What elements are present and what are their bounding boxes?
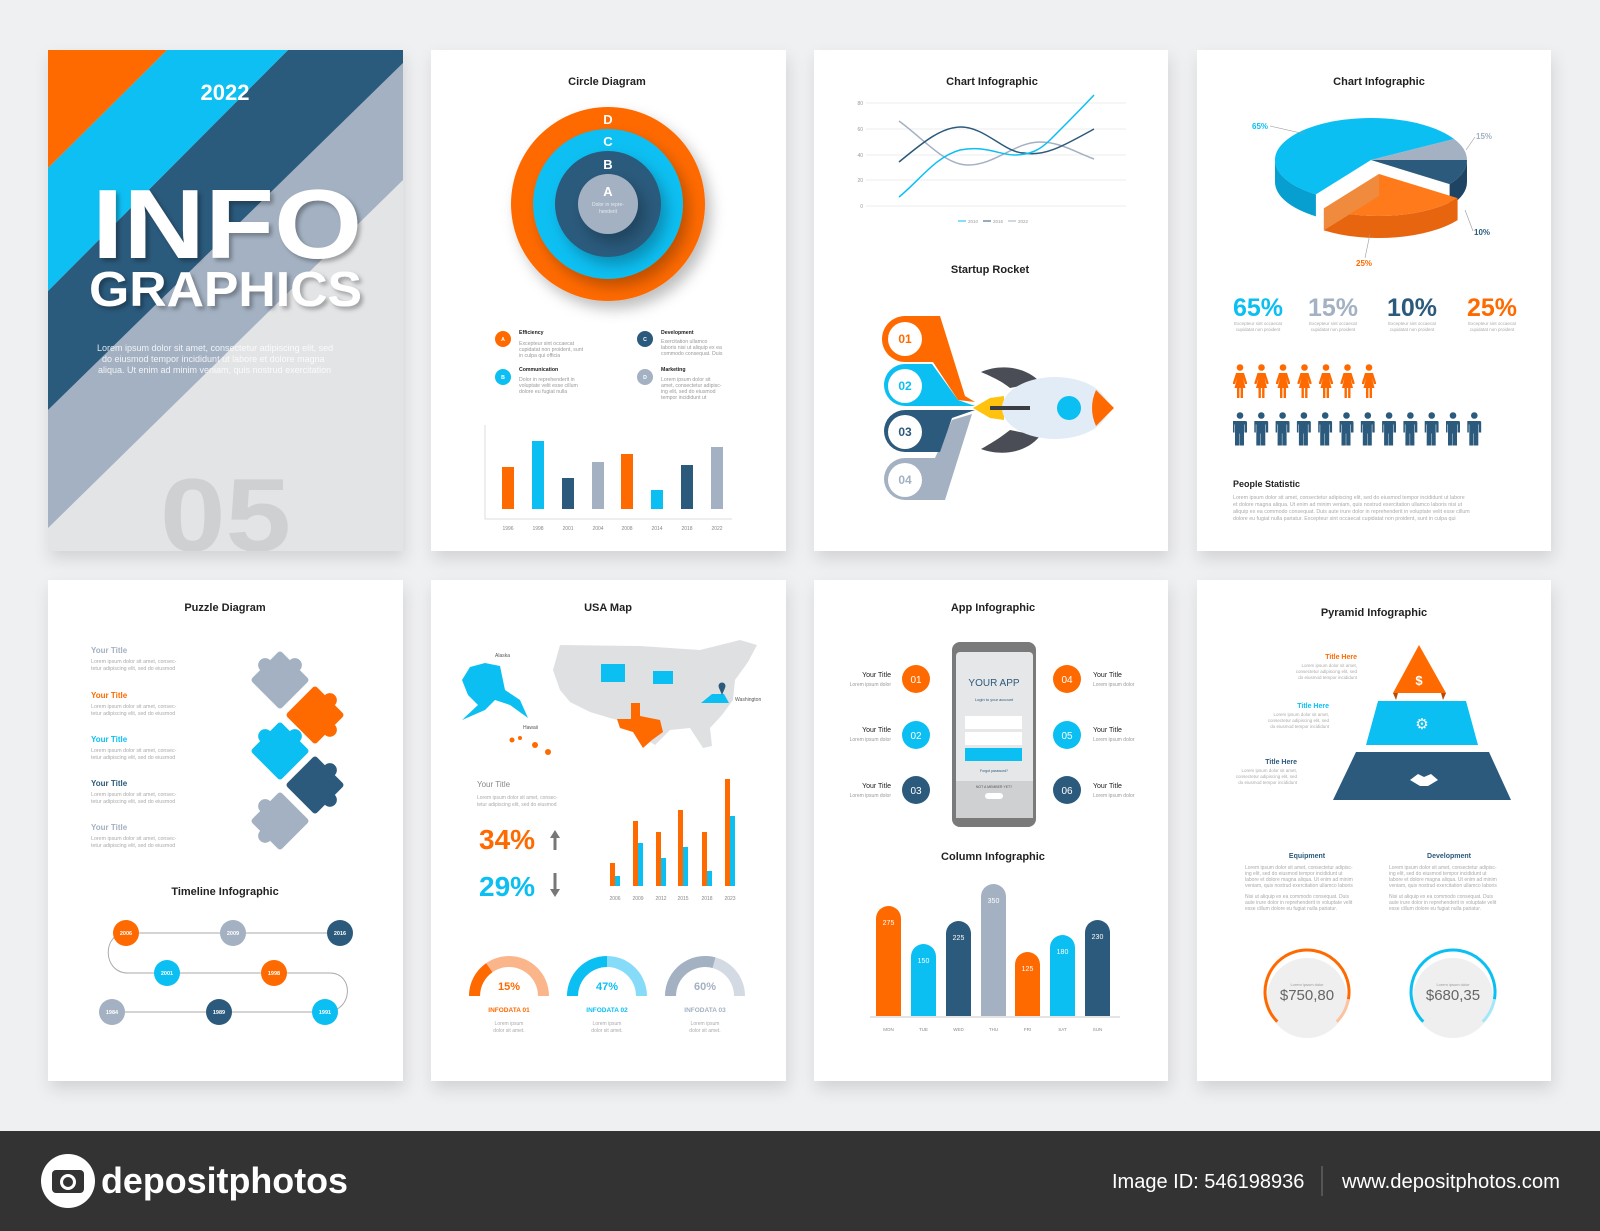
app steps: Lorem ipsum dolor <box>850 737 891 743</box>
pyramid labels: do eiusmod tempor incididunt <box>1238 780 1298 785</box>
phone mockup: NOT A MEMBER YET? <box>976 785 1012 789</box>
text columns: veniam, quis nostrud exercitation ullamco laboris <box>1245 883 1353 889</box>
bar chart <box>485 425 732 532</box>
grouped bar chart: 2012 <box>655 896 667 902</box>
timeline: 2006 <box>120 931 132 937</box>
stats text: 29% <box>479 871 535 902</box>
heading: chart infographic: Chart Infographic <box>946 76 1038 88</box>
text columns: aute irure dolor in reprehenderit in voluptate velit <box>1389 900 1497 906</box>
app steps: Your Title <box>862 727 891 734</box>
people icons <box>1232 364 1481 446</box>
column chart: 125 <box>1022 966 1033 973</box>
text columns: labore et dolore magna aliqua. Ut enim ad minim <box>1245 877 1353 883</box>
puzzle text items: tetur adipiscing elit, sed do eiusmod <box>91 666 175 672</box>
text columns: labore et dolore magna aliqua. Ut enim ad minim <box>1389 877 1497 883</box>
legend: in culpa qui officia <box>519 353 560 359</box>
timeline: 1998 <box>268 971 280 977</box>
legend <box>495 330 723 401</box>
legend: ing elit, sed do eiusmod <box>661 389 716 395</box>
3d pie chart: 25% <box>1356 259 1372 268</box>
puzzle text items: Lorem ipsum dolor sit amet, consec- <box>91 748 177 754</box>
app steps: Your Title <box>1093 783 1122 790</box>
puzzle text items: Your Title <box>91 823 128 832</box>
pyramid labels: consectetur adipiscing elit, sed <box>1268 718 1329 723</box>
panel: pie chart and people statistic: Excepteur sint occaecat <box>1234 321 1283 326</box>
gauges: 47% <box>596 981 618 993</box>
app steps: Lorem ipsum dolor <box>1093 793 1135 799</box>
phone mockup: YOUR APP <box>968 678 1020 689</box>
stats numbers: 25% <box>1467 294 1517 322</box>
gauges: dolor sit amet. <box>591 1028 623 1034</box>
text columns: Development <box>1427 853 1472 860</box>
text columns <box>1245 853 1497 912</box>
gauges: 60% <box>694 981 716 993</box>
bar chart: 1998 <box>532 526 544 532</box>
panel: puzzle and timeline <box>48 580 403 1081</box>
stats numbers <box>1233 294 1517 322</box>
timeline: 2001 <box>161 971 173 977</box>
app steps: Your Title <box>1093 727 1122 734</box>
app steps: 06 <box>1061 786 1073 797</box>
heading: USA Map <box>584 602 632 614</box>
panel: pie chart and people statistic: cupidatat non proident <box>1470 327 1515 332</box>
map: Washington <box>735 697 761 703</box>
text columns: ing elit, sed do eiusmod tempor incididunt ut <box>1245 871 1343 877</box>
stats text: Lorem ipsum dolor sit amet, consec- <box>477 795 558 801</box>
gauges: dolor sit amet. <box>493 1028 525 1034</box>
legend: Efficiency <box>519 330 544 336</box>
line chart: 60 <box>857 127 863 133</box>
app steps: Lorem ipsum dolor <box>1093 737 1135 743</box>
money circle 1: $750,80 <box>1280 987 1334 1004</box>
rocket tabs: 01 <box>898 332 912 346</box>
bar chart: 1996 <box>502 526 514 532</box>
text columns: Nisi ut aliquip ex ea commodo consequat. Duis <box>1245 894 1349 900</box>
puzzle text items: tetur adipiscing elit, sed do eiusmod <box>91 711 175 717</box>
puzzle text items: Your Title <box>91 735 128 744</box>
panel: pyramid <box>1197 580 1551 1081</box>
phone mockup: Login to your account <box>975 697 1014 702</box>
heading: startup rocket: Startup Rocket <box>951 264 1029 276</box>
stats text: tetur adipiscing elit, sed do eiusmod <box>477 802 557 808</box>
money circle 2: $680,35 <box>1426 987 1480 1004</box>
app steps: 03 <box>910 786 922 797</box>
image id: Image ID: 546198936 <box>1112 1171 1304 1193</box>
map: Hawaii <box>523 725 538 731</box>
people statistic text: et dolore magna aliqua. Ut enim ad minim veniam, quis nostrud exercitation ullamco laboris nisi ut <box>1233 502 1463 508</box>
grouped bar chart: 2023 <box>724 896 736 902</box>
text columns: esse cillum dolore eu fugiat nulla pariatur. <box>1245 906 1337 912</box>
pyramid labels <box>1236 654 1358 785</box>
app steps: Your Title <box>1093 672 1122 679</box>
cover text: Lorem ipsum dolor sit amet, consectetur adipiscing elit, sed <box>97 343 333 353</box>
rocket tabs: 04 <box>898 473 912 487</box>
heading: timeline: Timeline Infographic <box>171 886 279 898</box>
icon: rocket <box>973 367 1114 453</box>
rocket tabs <box>882 316 975 500</box>
app steps: 02 <box>910 731 922 742</box>
gauges: Lorem ipsum <box>593 1021 621 1027</box>
grouped bar chart: 2009 <box>632 896 644 902</box>
gauges: INFODATA 02 <box>586 1007 628 1014</box>
heading: column: Column Infographic <box>941 851 1045 863</box>
panel: pie chart and people statistic: Excepteur sint occaecat <box>1468 321 1517 326</box>
grouped bar chart: 2015 <box>677 896 689 902</box>
panel: line chart and startup rocket <box>814 50 1168 551</box>
stats text <box>477 780 560 902</box>
icon: camera logo <box>41 1154 95 1208</box>
heading: Chart Infographic <box>1333 76 1425 88</box>
puzzle text items <box>91 646 177 849</box>
3d pie chart: 10% <box>1474 228 1490 237</box>
gauges: INFODATA 01 <box>488 1007 530 1014</box>
app steps: Your Title <box>862 783 891 790</box>
phone mockup <box>952 642 1036 827</box>
line chart <box>857 95 1126 224</box>
bar chart: 2014 <box>651 526 663 532</box>
line chart: 2010 <box>968 219 979 224</box>
pyramid labels: do eiusmod tempor incididunt <box>1270 724 1330 729</box>
money circle 2: Lorem ipsum dolor <box>1436 982 1470 987</box>
bar chart: 2004 <box>592 526 604 532</box>
legend: Marketing <box>661 367 686 373</box>
legend: Dolor in reprehenderit in <box>519 377 575 383</box>
grouped bar chart: 2018 <box>701 896 713 902</box>
legend: voluptate velit esse cillum <box>519 383 578 389</box>
column chart: TUE <box>919 1027 928 1032</box>
panel: pie chart and people statistic: Excepteur sint occaecat <box>1309 321 1358 326</box>
legend: C <box>643 337 647 343</box>
text columns: esse cillum dolore eu fugiat nulla pariatur. <box>1389 906 1481 912</box>
pyramid labels: consectetur adipiscing elit, sed <box>1296 669 1357 674</box>
panel: pie chart and people statistic: Excepteur sint occaecat <box>1388 321 1437 326</box>
timeline: 1984 <box>106 1010 119 1016</box>
column chart: THU <box>989 1027 998 1032</box>
heading: Circle Diagram <box>568 76 646 88</box>
legend: Lorem ipsum dolor sit <box>661 377 711 383</box>
panel: pie chart and people statistic: cupidatat non proident <box>1311 327 1356 332</box>
panel: pie chart and people statistic: cupidatat non proident <box>1390 327 1435 332</box>
legend: A <box>501 337 505 343</box>
legend: amet, consectetur adipisc- <box>661 383 722 389</box>
pyramid labels: Lorem ipsum dolor sit amet, <box>1273 712 1329 717</box>
panel: app and column infographic <box>814 580 1168 1081</box>
stats numbers: 15% <box>1308 294 1358 322</box>
pyramid <box>1333 645 1511 800</box>
gauges: 15% <box>498 981 520 993</box>
app steps: Your Title <box>862 672 891 679</box>
timeline: 2016 <box>334 931 346 937</box>
cover title GRAPHICS: GRAPHICS <box>89 263 362 317</box>
cover year: 2022 <box>201 80 249 105</box>
rocket tabs: 02 <box>898 379 912 393</box>
footer bar <box>0 1131 1600 1231</box>
legend: D <box>643 375 647 381</box>
gauges: dolor sit amet. <box>689 1028 721 1034</box>
people statistic text: People Statistic <box>1233 479 1300 489</box>
puzzle text items: tetur adipiscing elit, sed do eiusmod <box>91 843 175 849</box>
panel: pie chart and people statistic <box>1197 50 1551 551</box>
nested circles: henderit <box>599 209 618 215</box>
nested circles <box>511 107 705 301</box>
panel: pie chart and people statistic: cupidatat non proident <box>1236 327 1281 332</box>
3d pie chart <box>1252 118 1492 268</box>
app steps: Lorem ipsum dolor <box>850 682 891 688</box>
text columns: veniam, quis nostrud exercitation ullamco laboris <box>1389 883 1497 889</box>
line chart: 80 <box>857 101 863 107</box>
app steps: Lorem ipsum dolor <box>1093 682 1135 688</box>
nested circles: B <box>603 157 613 172</box>
legend: Communication <box>519 367 558 373</box>
gauges: Lorem ipsum <box>495 1021 523 1027</box>
pyramid labels: consectetur adipiscing elit, sed <box>1236 774 1297 779</box>
text columns: ing elit, sed do eiusmod tempor incididunt ut <box>1389 871 1487 877</box>
bar chart: 2022 <box>711 526 723 532</box>
people statistic text <box>1233 479 1470 522</box>
text columns: Equipment <box>1289 853 1326 860</box>
legend: Exercitation ullamco <box>661 339 708 345</box>
bar chart: 2008 <box>621 526 633 532</box>
column chart: SAT <box>1058 1027 1067 1032</box>
grouped bar chart <box>609 779 736 902</box>
bar chart: 2018 <box>681 526 693 532</box>
app steps: 04 <box>1061 675 1073 686</box>
puzzle pieces <box>240 640 355 856</box>
column chart: SUN <box>1093 1027 1102 1032</box>
heading: Pyramid Infographic <box>1321 607 1427 619</box>
puzzle text items: tetur adipiscing elit, sed do eiusmod <box>91 799 175 805</box>
money circle 2 <box>1411 950 1495 1038</box>
people statistic text: Lorem ipsum dolor sit amet, consectetur adipiscing elit, sed do eiusmod tempor incididunt ut labore <box>1233 495 1465 501</box>
cover text: aliqua. Ut enim ad minim veniam, quis nostrud exercitation <box>98 365 331 375</box>
column chart: WED <box>953 1027 964 1032</box>
pyramid labels: Title Here <box>1297 703 1329 710</box>
nested circles: C <box>603 134 613 149</box>
gauges: INFODATA 03 <box>684 1007 726 1014</box>
3d pie chart: 65% <box>1252 122 1268 131</box>
line chart: 20 <box>857 178 863 184</box>
pyramid labels: Title Here <box>1265 759 1297 766</box>
puzzle text items: Lorem ipsum dolor sit amet, consec- <box>91 704 177 710</box>
text columns: aute irure dolor in reprehenderit in voluptate velit <box>1245 900 1353 906</box>
panel: usa map <box>431 580 786 1081</box>
legend: cupidatat non proident, sunt <box>519 347 584 353</box>
text columns: Lorem ipsum dolor sit amet, consectetur adipisc- <box>1245 865 1353 871</box>
nested circles: A <box>603 184 613 199</box>
column chart: 180 <box>1057 949 1068 956</box>
cover text <box>97 343 333 375</box>
rocket tabs: 03 <box>898 425 912 439</box>
puzzle text items: Your Title <box>91 779 128 788</box>
app steps: Lorem ipsum dolor <box>850 793 891 799</box>
puzzle text items: Lorem ipsum dolor sit amet, consec- <box>91 792 177 798</box>
timeline: 1991 <box>319 1010 331 1016</box>
legend: Development <box>661 330 694 336</box>
line chart: 0 <box>860 204 863 210</box>
pyramid labels: Lorem ipsum dolor sit amet, <box>1241 768 1297 773</box>
puzzle text items: Lorem ipsum dolor sit amet, consec- <box>91 836 177 842</box>
column chart: MON <box>883 1027 894 1032</box>
grouped bar chart: 2006 <box>609 896 621 902</box>
gauges: Lorem ipsum <box>691 1021 719 1027</box>
cover number 05: 05 <box>160 458 291 574</box>
nested circles: Dolor in repre- <box>592 202 624 208</box>
stats numbers: 65% <box>1233 294 1283 322</box>
timeline: 2009 <box>227 931 239 937</box>
text columns: Nisi ut aliquip ex ea commodo consequat. Duis <box>1389 894 1493 900</box>
timeline: 1989 <box>213 1010 225 1016</box>
stats text: 34% <box>479 824 535 855</box>
bar chart: 2001 <box>562 526 574 532</box>
cover title INFO: INFO <box>92 169 362 279</box>
panel: circle diagram <box>431 50 786 551</box>
app steps <box>850 665 1135 804</box>
pyramid: ⚙ <box>1415 716 1429 733</box>
column chart: 150 <box>918 958 929 965</box>
website: www.depositphotos.com <box>1341 1171 1560 1193</box>
column chart <box>870 884 1120 1032</box>
panel: cover <box>48 50 403 574</box>
stats text: Your Title <box>477 780 511 789</box>
heading: puzzle: Puzzle Diagram <box>184 602 266 614</box>
column chart: 350 <box>988 898 999 905</box>
column chart: 230 <box>1092 934 1103 941</box>
app steps: 01 <box>910 675 922 686</box>
column chart: FRI <box>1024 1027 1031 1032</box>
legend: dolore eu fugiat nulla <box>519 389 567 395</box>
pyramid labels: Title Here <box>1325 654 1357 661</box>
map: Alaska <box>495 653 510 659</box>
legend: tempor incididunt ut <box>661 395 707 401</box>
gauges <box>469 956 745 1034</box>
legend: Excepteur sint occaecat <box>519 341 575 347</box>
cover text: do eiusmod tempor incididunt ut labore et dolore magna <box>102 354 325 364</box>
heading: app: App Infographic <box>951 602 1035 614</box>
logo text: depositphotos <box>101 1160 348 1201</box>
column chart: 225 <box>953 935 964 942</box>
money circle 1 <box>1265 950 1349 1038</box>
line chart: 2022 <box>1018 219 1029 224</box>
legend: B <box>501 375 505 381</box>
puzzle text items: Lorem ipsum dolor sit amet, consec- <box>91 659 177 665</box>
line chart: 2016 <box>993 219 1004 224</box>
map <box>462 640 761 755</box>
legend: commodo consequat. Duis <box>661 351 723 357</box>
text columns: Lorem ipsum dolor sit amet, consectetur adipisc- <box>1389 865 1497 871</box>
stats numbers: 10% <box>1387 294 1437 322</box>
puzzle text items: Your Title <box>91 646 128 655</box>
timeline <box>99 920 353 1025</box>
line chart: 40 <box>857 153 863 159</box>
pyramid labels: do eiusmod tempor incididunt <box>1298 675 1358 680</box>
phone mockup: Forgot password? <box>980 769 1008 773</box>
people statistic text: aliquip ex ea commodo consequat. Duis aute irure dolor in reprehenderit in voluptate velit esse cillum <box>1233 509 1470 515</box>
legend: laboris nisi ut aliquip ex ea <box>661 345 722 351</box>
pyramid: $ <box>1415 673 1423 688</box>
puzzle text items: Your Title <box>91 691 128 700</box>
puzzle text items: tetur adipiscing elit, sed do eiusmod <box>91 755 175 761</box>
money circle 1: Lorem ipsum dolor <box>1290 982 1324 987</box>
nested circles: D <box>603 112 613 127</box>
column chart: 275 <box>883 920 894 927</box>
people statistic text: dolore eu fugiat nulla pariatur. Excepteur sint occaecat cupidatat non proident, sunt in culpa qui <box>1233 516 1456 522</box>
3d pie chart: 15% <box>1476 132 1492 141</box>
pyramid labels: Lorem ipsum dolor sit amet, <box>1301 663 1357 668</box>
app steps: 05 <box>1061 731 1073 742</box>
